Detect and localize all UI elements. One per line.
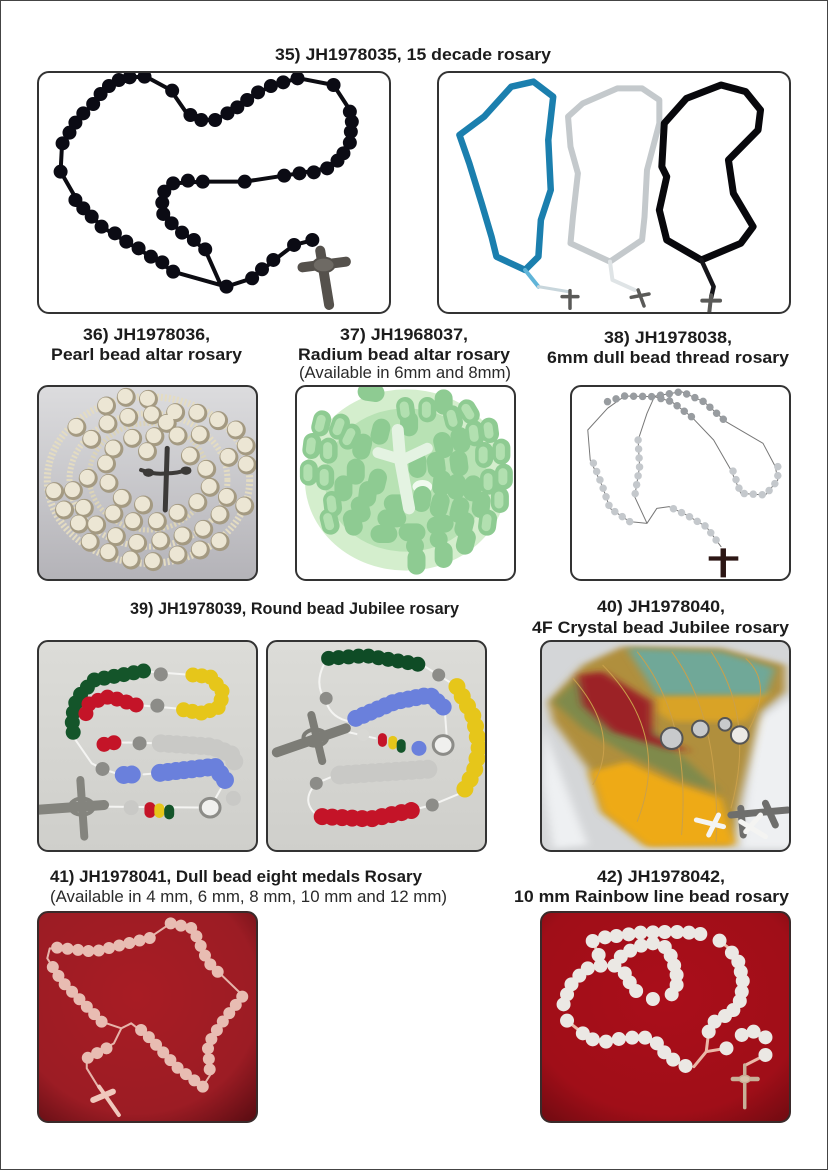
heading: 36: Pearl bead altar rosary: [51, 346, 243, 364]
heading: 36: [51, 326, 243, 364]
panel: 38 dull bead thread rosary photo: [571, 386, 790, 580]
rosary: black: [659, 85, 761, 313]
panel: 35 black rosary photo: [38, 72, 390, 313]
icon: crucifix: [141, 448, 190, 510]
icon: crucifix: [733, 1065, 758, 1108]
heading: 38: [547, 329, 790, 367]
icon: white crucifix: [378, 430, 427, 508]
panel: 40 crystal bead rosaries photo: [541, 641, 795, 851]
heading: 37: [298, 326, 511, 382]
heading: 41: (Available in 4 mm, 6 mm, 8 mm, 10 mm and 12 mm): [50, 888, 447, 906]
panel: 37 radium bead rosary photo: [296, 386, 515, 580]
panel: 39 jubilee rosary photo left: [35, 641, 257, 851]
icon: crucifix: [93, 1087, 119, 1115]
heading: 41: 41) JH1978041, Dull bead eight medals Rosary: [50, 868, 423, 886]
heading: 40: 40) JH1978040,: [597, 598, 725, 616]
icon: crucifix: [302, 251, 346, 305]
panel: 42 white bead rosary photo: [541, 912, 790, 1122]
heading: 37: 37) JH1968037,: [340, 326, 468, 344]
rosary: white: [568, 88, 659, 306]
heading: 39: 39) JH1978039, Round bead Jubilee rosary: [130, 600, 460, 618]
heading: 40: [532, 598, 790, 637]
heading: 42: [514, 868, 790, 906]
panel: 36 pearl rosary photo: [38, 386, 257, 580]
icon: large medal: [200, 798, 220, 817]
heading: 36: 36) JH1978036,: [83, 326, 210, 344]
panel: 35 three thread rosaries photo: [438, 72, 790, 313]
heading: 40: 4F Crystal bead Jubilee rosary: [532, 619, 790, 637]
rosary: blue: [459, 82, 578, 308]
crosses: [696, 803, 788, 837]
icon: large medal: [433, 736, 453, 754]
heading: 35: 35) JH1978035, 15 decade rosary: [275, 46, 552, 64]
heading: 38: 38) JH1978038,: [604, 329, 732, 347]
heading: 42: 10 mm Rainbow line bead rosary: [514, 888, 790, 906]
heading: 42: 42) JH1978042,: [597, 868, 725, 886]
heading: 38: 6mm dull bead thread rosary: [547, 349, 790, 367]
icon: crucifix: [35, 780, 104, 837]
heading: 37: Radium bead altar rosary: [298, 346, 511, 364]
heading: 37: (Available in 6mm and 8mm): [299, 364, 511, 382]
icon: crucifix: [277, 715, 346, 761]
icon: dark cross: [709, 548, 738, 577]
medals: [661, 718, 749, 749]
panel: 41 dull bead rosary photo: [38, 912, 257, 1122]
panel: 39 jubilee rosary photo right: [267, 641, 486, 851]
heading: 41: [50, 868, 447, 906]
